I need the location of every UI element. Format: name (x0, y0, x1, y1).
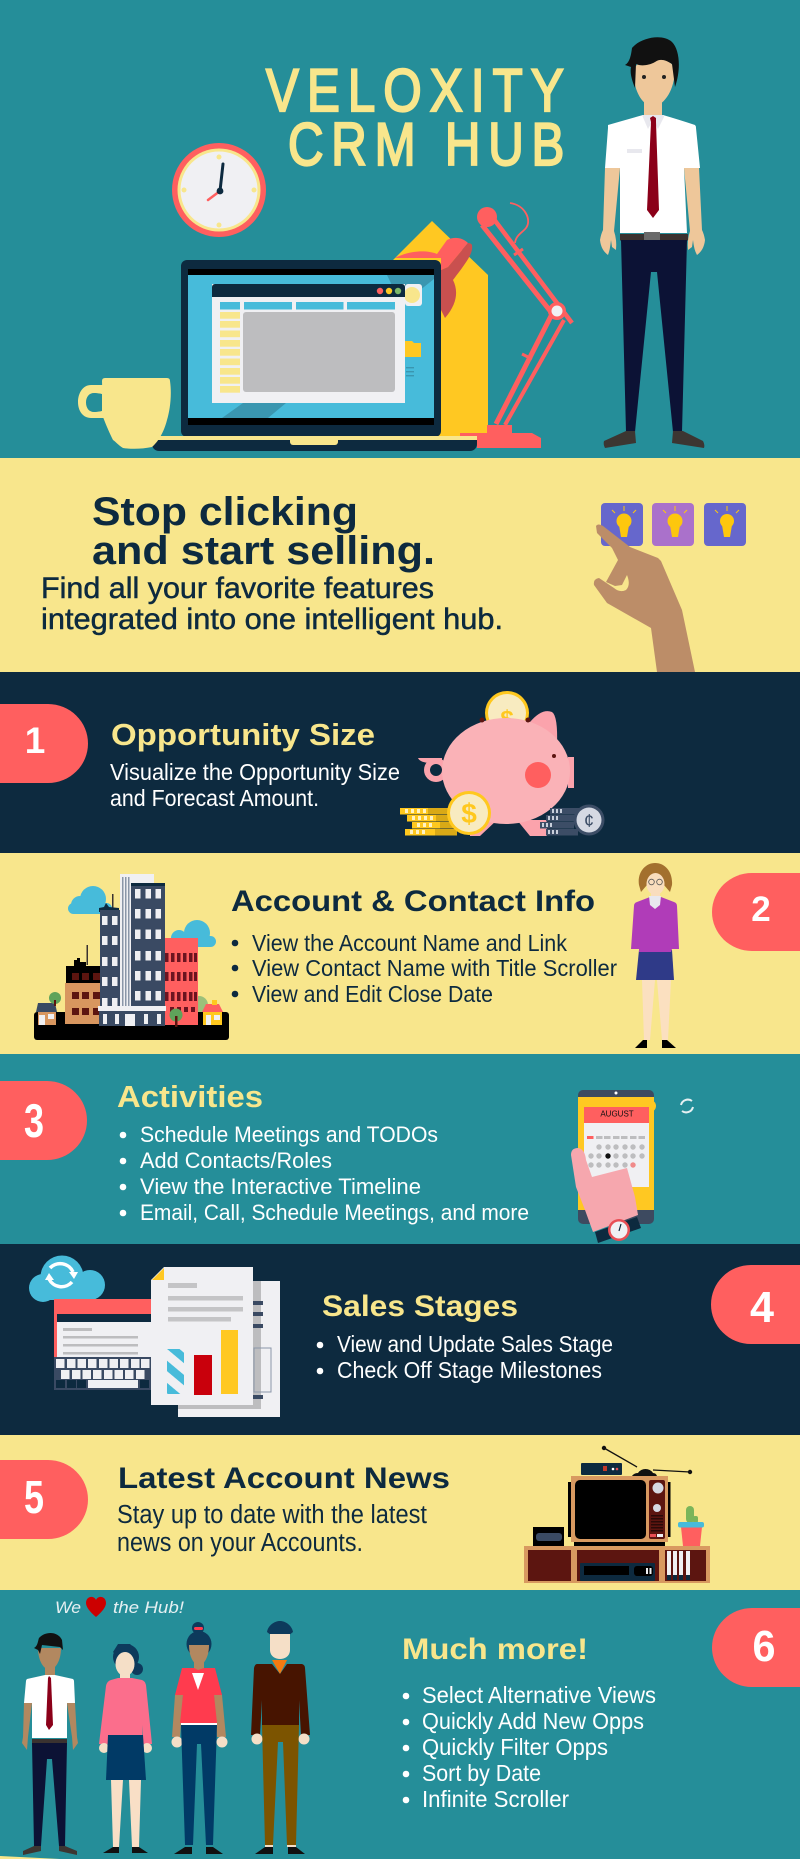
heading: stop clicking: Stop clicking (92, 490, 358, 534)
list: account features: View the Account Name and Link (252, 930, 567, 956)
heading: much more: Much more! (402, 1633, 588, 1666)
list: account features: View and Edit Close Date (252, 981, 493, 1007)
heading: account and contact info: Account & Contact Info (231, 885, 595, 918)
panel: much more (0, 1590, 800, 1859)
heading: sales stages: Sales Stages (322, 1290, 518, 1323)
caption: we love the hub (55, 1597, 184, 1617)
list: sales stages features: View and Update Sales Stage (337, 1331, 613, 1357)
panel: hero (0, 0, 800, 458)
badge 3: 3 (24, 1094, 44, 1147)
app window on screen (212, 284, 405, 403)
text: opportunity description: Visualize the Opportunity Size (110, 759, 400, 785)
panel: sales stages (0, 1244, 800, 1435)
title (266, 56, 564, 178)
icon: piggy bank with coins: $ (500, 706, 514, 733)
badge 5 (0, 1460, 88, 1539)
panel: account and contact info (0, 853, 800, 1054)
icon: piggy bank with coins (400, 691, 604, 836)
title: VELOXITY (266, 56, 564, 124)
heading: latest account news: Latest Account News (118, 1462, 450, 1495)
list: sales stages features (317, 1331, 613, 1383)
list: more features: Quickly Add New Opps (422, 1708, 644, 1734)
badge 6: 6 (752, 1622, 776, 1671)
badge 1: 1 (25, 720, 45, 761)
list: activities features: Email, Call, Schedule Meetings, and more (140, 1200, 529, 1225)
caption: we love the hub: We (55, 1598, 81, 1617)
panel: intro (0, 458, 800, 672)
list: account features: View Contact Name with Title Scroller (252, 955, 617, 981)
intro text: Find all your favorite features (41, 572, 434, 605)
badge 2: 2 (751, 890, 771, 929)
heading: stop clicking (92, 490, 435, 573)
icon: browser and keyboard (54, 1299, 151, 1390)
icon: yellow pencil shape (393, 221, 488, 436)
figure: man in white shirt (22, 1633, 78, 1855)
heading: activities: Activities (117, 1079, 263, 1114)
icon: coffee mug (78, 378, 171, 449)
icon: desk lamp (395, 203, 572, 448)
figure: businesswoman (631, 863, 679, 1048)
caption: we love the hub: the Hub! (113, 1598, 184, 1617)
panel: opportunity size (0, 672, 800, 853)
icon: heart (86, 1597, 106, 1617)
text: opportunity description (110, 759, 400, 811)
badge 4: 4 (750, 1283, 775, 1332)
list: more features (403, 1682, 656, 1812)
icon: phone calendar with hand (571, 1090, 656, 1243)
list: more features: Quickly Filter Opps (422, 1734, 608, 1760)
icon: piggy bank with coins: ¢ (584, 811, 594, 831)
list: account features (232, 930, 617, 1007)
icon: wall clock (172, 143, 266, 237)
figure: man in brown sweater (251, 1621, 310, 1854)
icon: city buildings (34, 874, 229, 1040)
badge 6 (712, 1608, 800, 1687)
figure: woman in red top (172, 1622, 228, 1854)
text: news description (117, 1501, 427, 1557)
text: news description: news on your Accounts. (117, 1529, 363, 1557)
icon: piggy bank with coins: $ (461, 798, 477, 829)
list: more features: Sort by Date (422, 1760, 541, 1786)
badge 1 (0, 704, 88, 783)
icon: retro tv on cabinet (524, 1446, 710, 1583)
list: more features: Infinite Scroller (422, 1786, 569, 1812)
panel: activities (0, 1054, 800, 1244)
figure: businessman (600, 37, 705, 448)
heading: stop clicking: and start selling. (92, 529, 435, 573)
icon: phone calendar with hand: AUGUST (600, 1110, 634, 1118)
icon: laptop (152, 260, 477, 451)
list: activities features: View the Interactive Timeline (140, 1174, 421, 1199)
intro text (41, 572, 503, 636)
panel: latest account news (0, 1435, 800, 1590)
badge 4 (711, 1265, 800, 1344)
icon: documents with bar chart (151, 1267, 280, 1417)
list: sales stages features: Check Off Stage Milestones (337, 1357, 602, 1383)
text: opportunity description: and Forecast Amount. (110, 785, 319, 811)
text: news description: Stay up to date with the latest (117, 1501, 427, 1529)
figure: woman in pink cardigan (99, 1644, 152, 1853)
title: CRM HUB (288, 110, 564, 178)
list: activities features: Schedule Meetings and TODOs (140, 1122, 438, 1147)
icon: refresh (681, 1100, 693, 1112)
list: activities features (120, 1122, 529, 1225)
badge 5: 5 (24, 1471, 44, 1523)
intro text: integrated into one intelligent hub. (41, 603, 503, 636)
badge 2 (712, 873, 800, 951)
list: activities features: Add Contacts/Roles (140, 1148, 332, 1173)
list: more features: Select Alternative Views (422, 1682, 656, 1708)
icon: sync cloud (29, 1256, 105, 1302)
heading: opportunity size: Opportunity Size (111, 717, 375, 752)
icon: pointing hand (594, 524, 695, 672)
badge 3 (0, 1081, 87, 1160)
icon: three light bulb cards (601, 503, 746, 546)
